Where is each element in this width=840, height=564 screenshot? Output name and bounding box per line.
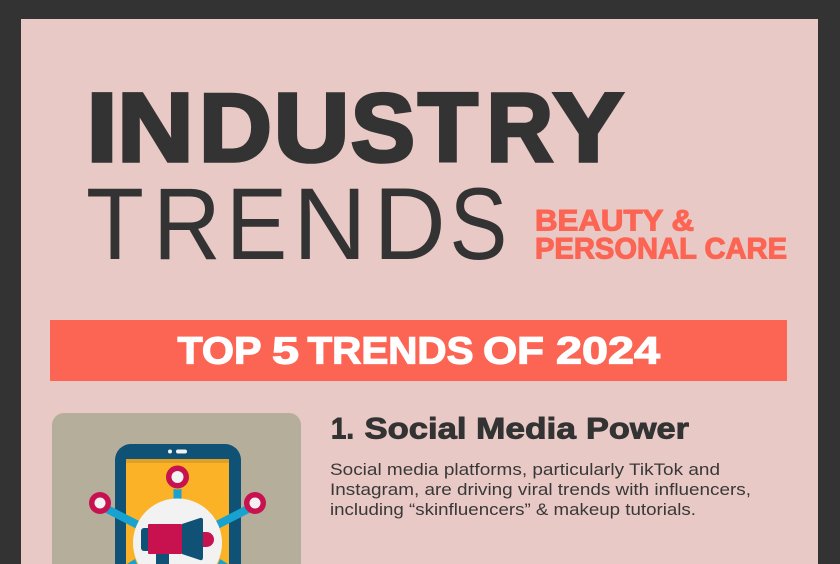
icon: network connectors [102, 485, 253, 564]
subtitle: beauty and personal care: BEAUTY & [535, 204, 694, 238]
title: trends [86, 166, 507, 282]
icon: megaphone [141, 518, 214, 564]
banner heading: TRENDS [308, 330, 474, 372]
title: industry: U [274, 75, 349, 182]
subtitle: beauty and personal care [535, 204, 787, 266]
title: trends: R [153, 166, 221, 281]
icon: phone body [115, 444, 241, 564]
heading: social media power: Power [586, 412, 689, 446]
title: industry [86, 73, 624, 183]
icon: top node [166, 465, 190, 489]
banner [50, 320, 787, 381]
title: industry: Y [553, 74, 624, 182]
icon: right node [244, 492, 266, 514]
subtitle: beauty and personal care: PERSONAL CARE [535, 232, 787, 266]
banner heading: 5 [272, 330, 299, 372]
icon: phone screen [126, 459, 229, 564]
title: trends: T [86, 167, 144, 281]
heading: social media power [331, 412, 689, 446]
title: industry: S [351, 75, 415, 182]
title: industry: I [86, 74, 118, 182]
title: industry: N [117, 74, 194, 182]
title: trends: E [226, 166, 287, 281]
title: industry: T [418, 73, 478, 182]
banner heading: 2024 [556, 330, 660, 372]
icon: megaphone disc [133, 498, 222, 564]
icon: phone speaker [168, 450, 187, 454]
text block: social media description: including “skinfluencers” & makeup tutorials. [330, 500, 696, 519]
title: industry: R [486, 74, 553, 183]
title: industry: D [199, 73, 272, 182]
banner heading: TOP [178, 330, 262, 372]
title: trends: D [374, 168, 446, 281]
heading: social media power: Social [364, 412, 466, 446]
title: trends: N [293, 167, 367, 281]
title: trends: S [450, 167, 507, 282]
banner heading: OF [483, 330, 544, 372]
icon: left node [89, 492, 111, 514]
icon card: social media megaphone [52, 413, 301, 564]
text block: social media description: Social media platforms, particularly TikTok and [330, 460, 720, 479]
heading: social media power: Media [476, 412, 576, 446]
text block: social media description [330, 460, 751, 519]
banner heading [178, 330, 660, 372]
text block: social media description: Instagram, are driving viral trends with influencers, [330, 480, 751, 499]
heading: social media power: 1. [331, 412, 354, 446]
